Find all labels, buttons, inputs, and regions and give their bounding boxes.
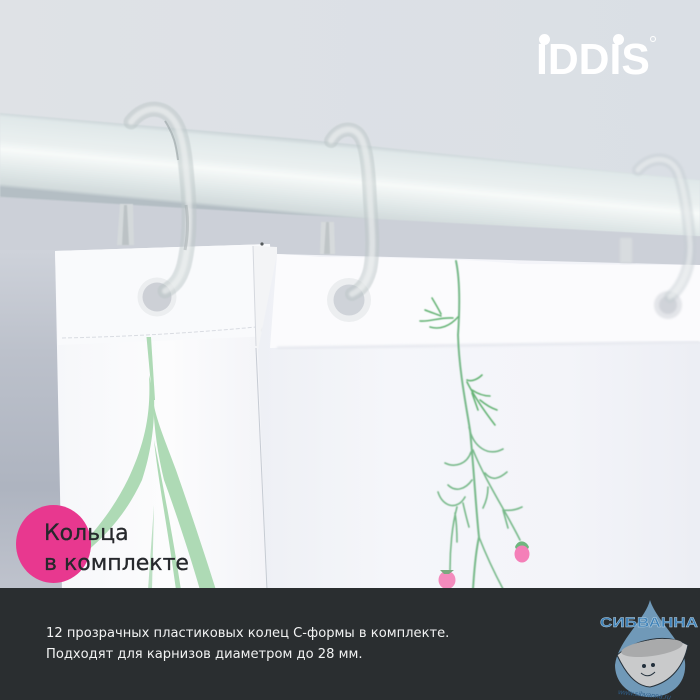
logo: IDDIS: IDDIS [536, 35, 650, 84]
stem: hanging plant print [420, 261, 522, 589]
callout: pink circle with title [16, 505, 189, 583]
curtain: left panel [55, 242, 280, 590]
title: в комплекте [44, 551, 189, 576]
watermark logo: Сибванна [600, 600, 698, 700]
shower rod [0, 113, 700, 236]
description text [46, 626, 449, 662]
footer band [0, 588, 700, 700]
ring: left [117, 109, 189, 316]
icon: strawberry buds [438, 541, 530, 589]
leaves: large green print [82, 337, 216, 590]
watermark logo: Сибванна: СИБВАННА [600, 614, 698, 630]
description text: 12 прозрачных пластиковых колец С-формы в комплекте. [46, 626, 449, 641]
title: Кольца [44, 521, 129, 546]
ring: right [620, 159, 690, 319]
title [44, 521, 189, 576]
ring: middle [320, 130, 372, 322]
description text: Подходят для карнизов диаметром до 28 мм. [46, 647, 362, 662]
curtain: right panel [256, 254, 700, 590]
pink circle [16, 505, 91, 583]
